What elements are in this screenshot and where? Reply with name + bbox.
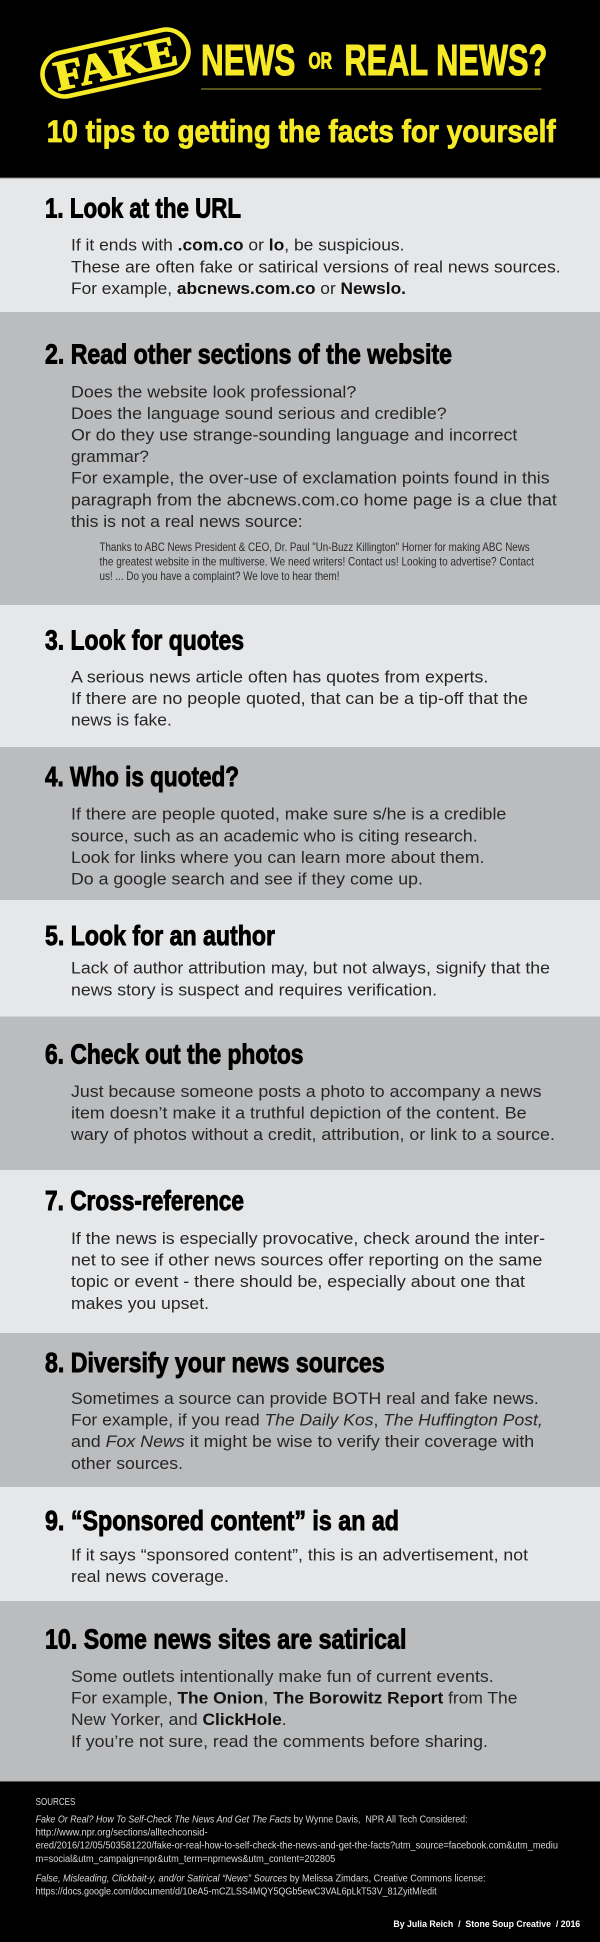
text: tip 8 body: For example, if you read The Daily Kos , The Huffington Post, bbox=[71, 1412, 543, 1430]
text: tip 10 body bbox=[71, 1668, 517, 1751]
heading: tip 8: 8. Diversify your news sources bbox=[45, 1347, 385, 1378]
text: tip 4 body: Look for links where you can learn more about them. bbox=[71, 849, 484, 867]
text: sources: https://docs.google.com/document/d/10eA5-mCZLSS4MQY5QGb5ewC3VAL6pLkT53V_81ZyitM/edit bbox=[36, 1885, 437, 1897]
panel: tip 8 bbox=[0, 1333, 600, 1487]
text: tip 8 body: Sometimes a source can provide BOTH real and fake news. bbox=[71, 1390, 539, 1408]
text: tip 9 body: If it says “sponsored content”, this is an advertisement, not bbox=[71, 1546, 528, 1564]
text: sources: SOURCES bbox=[36, 1796, 75, 1808]
panel: tip 3 bbox=[0, 605, 600, 747]
text: tip 1 body: These are often fake or satirical versions of real news sources. bbox=[71, 258, 561, 276]
text: tip 2 body: this is not a real news source: bbox=[71, 513, 303, 531]
text: sources: http://www.npr.org/sections/alltechconsid- bbox=[36, 1826, 208, 1838]
text: tip 5 body: Lack of author attribution may, but not always, signify that the bbox=[71, 960, 550, 978]
heading: tip 10: 10. Some news sites are satirical bbox=[45, 1623, 406, 1654]
text: tip 7 body: topic or event - there should be, especially about one that bbox=[71, 1273, 525, 1291]
panel: tip 6 bbox=[0, 1016, 600, 1170]
text: tip 4 body bbox=[71, 806, 506, 888]
text: tip 6 body: Just because someone posts a photo to accompany a news bbox=[71, 1083, 542, 1101]
text: sources bbox=[36, 1796, 558, 1897]
text: tip 2 body: grammar? bbox=[71, 448, 149, 466]
heading: tip 6: 6. Check out the photos bbox=[45, 1038, 304, 1069]
panel: tip 7 bbox=[0, 1170, 600, 1333]
text: tip 6 body: item doesn’t make it a truthful depiction of the content. Be bbox=[71, 1105, 527, 1123]
title: NEWS bbox=[201, 36, 295, 85]
text: tip 9 body: real news coverage. bbox=[71, 1568, 229, 1586]
text: quoted paragraph bbox=[100, 540, 534, 583]
text: tip 1 body: For example, abcnews.com.co or Newslo. bbox=[71, 280, 406, 298]
text: tip 6 body: wary of photos without a credit, attribution, or link to a source. bbox=[70, 1126, 555, 1144]
text: tip 4 body: If there are people quoted, make sure s/he is a credible bbox=[71, 806, 506, 824]
panel: tip 2 bbox=[0, 312, 600, 605]
text: tip 2 body bbox=[71, 383, 557, 531]
text: tip 3 body: A serious news article often has quotes from experts. bbox=[71, 668, 488, 686]
panel: tip 10 bbox=[0, 1601, 600, 1781]
text: tip 8 body: other sources. bbox=[71, 1455, 183, 1473]
text: tip 1 body bbox=[71, 237, 561, 298]
text: sources: Fake Or Real? How To Self-Check The News And Get The Facts by Wynne Davis, NPR All Tech Considered: bbox=[36, 1813, 468, 1825]
panel: tip 1 bbox=[0, 178, 600, 312]
text: tip 10 body: If you’re not sure, read the comments before sharing. bbox=[71, 1733, 488, 1751]
text: tip 7 body: net to see if other news sources offer reporting on the same bbox=[71, 1252, 542, 1270]
text: sources: m=social&utm_campaign=npr&utm_term=nprnews&utm_content=202805 bbox=[36, 1853, 335, 1865]
panel: header bbox=[0, 0, 600, 178]
text: tip 2 body: Does the website look professional? bbox=[71, 383, 356, 401]
heading: tip 2: 2. Read other sections of the website bbox=[45, 338, 452, 369]
panel: footer bbox=[0, 1781, 600, 1942]
text: tip 2 body: Or do they use strange-sounding language and incorrect bbox=[71, 426, 518, 444]
text: tip 3 body bbox=[71, 668, 528, 730]
text: tip 10 body: Some outlets intentionally make fun of current events. bbox=[71, 1668, 494, 1686]
panel: tip 9 bbox=[0, 1487, 600, 1601]
title bbox=[201, 36, 547, 85]
text: tip 8 body bbox=[71, 1390, 543, 1473]
text: tip 6 body bbox=[70, 1083, 555, 1144]
text: tip 5 body bbox=[71, 960, 550, 999]
text: tip 1 body: If it ends with .com.co or lo, be suspicious. bbox=[71, 237, 404, 255]
text: tip 2 body: Does the language sound serious and credible? bbox=[71, 405, 447, 423]
heading: tip 5: 5. Look for an author bbox=[45, 920, 275, 951]
text: credit: By Julia Reich / Stone Soup Creative / 2016 bbox=[393, 1919, 580, 1930]
title: OR bbox=[308, 47, 332, 73]
text: tip 3 body: news is fake. bbox=[71, 712, 172, 730]
heading: tip 4: 4. Who is quoted? bbox=[45, 761, 239, 792]
text: tip 10 body: For example, The Onion , The Borowitz Report from The bbox=[71, 1690, 517, 1708]
panel: tip 5 bbox=[0, 900, 600, 1016]
icon: FAKE stamp bbox=[38, 25, 193, 103]
heading: tip 3: 3. Look for quotes bbox=[45, 624, 244, 655]
heading: tip 1: 1. Look at the URL bbox=[45, 192, 241, 224]
icon: FAKE stamp: FAKE bbox=[50, 29, 181, 100]
text: tip 4 body: Do a google search and see if they come up. bbox=[71, 870, 423, 888]
text: tip 2 body: For example, the over-use of exclamation points found in this bbox=[71, 470, 550, 488]
text: tip 7 body: If the news is especially provocative, check around the inter- bbox=[71, 1230, 545, 1248]
text: tip 10 body: New Yorker, and ClickHole. bbox=[71, 1711, 287, 1729]
text: tip 2 body: paragraph from the abcnews.com.co home page is a clue that bbox=[71, 491, 557, 509]
heading: tip 9: 9. “Sponsored content” is an ad bbox=[45, 1505, 399, 1536]
text: tip 8 body: and Fox News it might be wise to verify their coverage with bbox=[71, 1433, 534, 1451]
panel: tip 4 bbox=[0, 747, 600, 900]
text: sources: False, Misleading, Clickbait-y, and/or Satirical “News” Sources by Melissa Zimdars, Creative Commons license: bbox=[36, 1872, 486, 1884]
text: tip 7 body: makes you upset. bbox=[71, 1295, 209, 1313]
text: tip 3 body: If there are no people quoted, that can be a tip-off that the bbox=[71, 690, 528, 708]
text: tip 4 body: source, such as an academic who is citing research. bbox=[71, 827, 478, 845]
heading: tip 7: 7. Cross-reference bbox=[45, 1185, 244, 1216]
text: tip 7 body bbox=[71, 1230, 545, 1313]
text: tip 5 body: news story is suspect and requires verification. bbox=[71, 981, 437, 999]
text: tip 9 body bbox=[71, 1546, 528, 1586]
text: quoted paragraph: us! ... Do you have a complaint? We love to hear them! bbox=[100, 569, 340, 583]
